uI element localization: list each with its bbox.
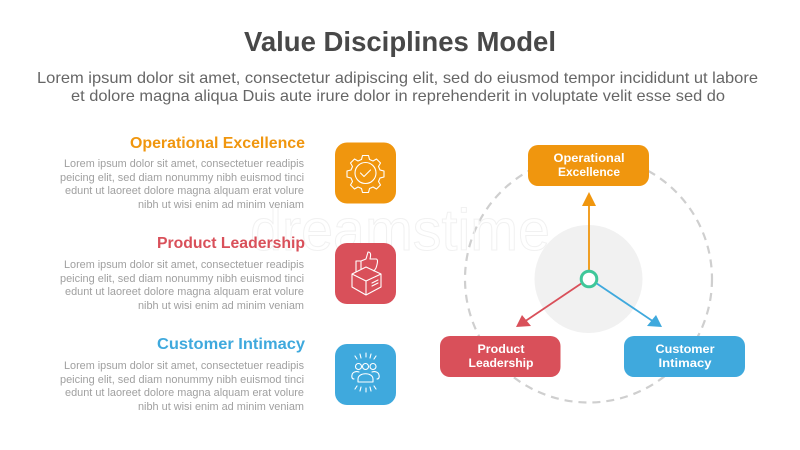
box: product leadership: Product xyxy=(478,342,524,356)
panel: product leadership text: Lorem ipsum dolor sit amet, consectetuer readipis xyxy=(64,259,305,271)
subtitle: et dolore magna aliqua Duis aute irure dolor in reprehenderit in voluptate velit esse sed do xyxy=(71,88,725,105)
panel: product leadership text: edunt ut laoreet dolore magna alquam erat volure xyxy=(65,286,304,298)
panel: customer intimacy text: peicing elit, sed diam nonummy nibh euismod tinci xyxy=(60,374,304,386)
title: Value Disciplines Model xyxy=(244,26,556,57)
arrow: to customer intimacy xyxy=(596,283,662,327)
arrow: to product leadership xyxy=(516,283,582,327)
arrow: to operational excellence xyxy=(582,192,596,272)
panel: operational excellence text: nibh ut wisi enim ad minim veniam xyxy=(138,199,304,211)
panel: product leadership text xyxy=(60,235,305,312)
dashed orbit circle xyxy=(465,156,712,402)
subtitle xyxy=(37,70,758,105)
subtitle: Lorem ipsum dolor sit amet, consectetur adipiscing elit, sed do eiusmod tempor incididunt ut labore xyxy=(37,70,758,87)
box: operational excellence xyxy=(528,145,649,186)
box: customer intimacy xyxy=(624,336,745,377)
box: customer intimacy: Customer xyxy=(656,342,715,356)
panel: operational excellence text xyxy=(60,135,305,211)
panel: operational excellence text: Operational Excellence xyxy=(130,135,305,152)
panel: product leadership text: Product Leadership xyxy=(157,235,305,252)
panel: customer intimacy text xyxy=(60,336,305,413)
box: customer intimacy: Intimacy xyxy=(658,356,712,370)
panel: product leadership text: nibh ut wisi enim ad minim veniam xyxy=(138,300,304,312)
icon: group of people with rays xyxy=(335,344,396,405)
panel: customer intimacy text: nibh ut wisi enim ad minim veniam xyxy=(138,401,304,413)
icon: box with thumbs up xyxy=(335,243,396,304)
watermark: dreamstime xyxy=(250,198,550,263)
box: operational excellence: Operational xyxy=(554,151,624,165)
panel: customer intimacy text: Lorem ipsum dolor sit amet, consectetuer readipis xyxy=(64,360,305,372)
panel: customer intimacy text: Customer Intimacy xyxy=(157,336,305,353)
panel: customer intimacy text: edunt ut laoreet dolore magna alquam erat volure xyxy=(65,387,304,399)
icon: gear with check xyxy=(335,142,396,204)
center disc xyxy=(534,225,642,333)
box: operational excellence: Excellence xyxy=(558,165,620,179)
panel: operational excellence text: Lorem ipsum dolor sit amet, consectetuer readipis xyxy=(64,158,305,170)
panel: operational excellence text: peicing elit, sed diam nonummy nibh euismod tinci xyxy=(60,172,304,184)
center node xyxy=(581,271,597,287)
box: product leadership: Leadership xyxy=(468,356,534,370)
panel: product leadership text: peicing elit, sed diam nonummy nibh euismod tinci xyxy=(60,273,304,285)
box: product leadership xyxy=(440,336,560,377)
panel: operational excellence text: edunt ut laoreet dolore magna alquam erat volure xyxy=(65,185,304,197)
